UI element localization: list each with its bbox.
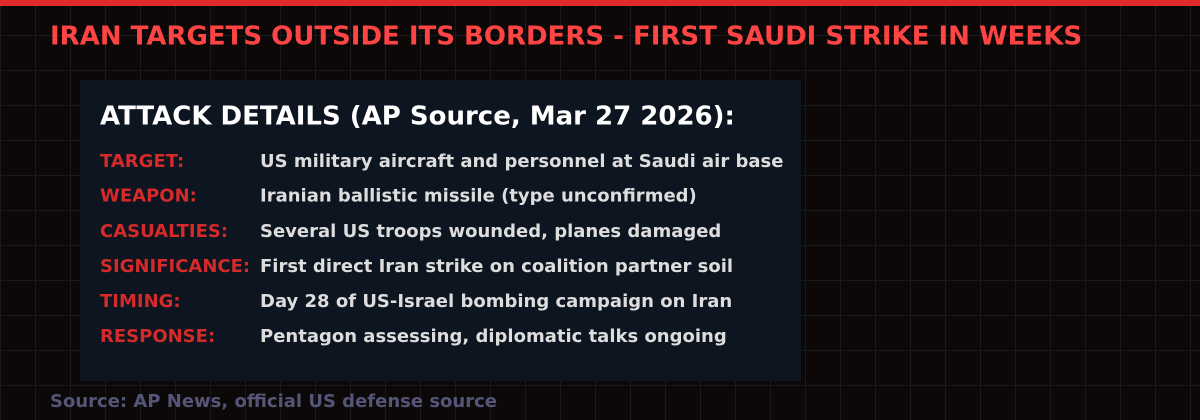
row: target: US military aircraft and personnel at Saudi air base — [260, 151, 783, 172]
row: significance: SIGNIFICANCE: — [100, 256, 250, 277]
title: IRAN TARGETS OUTSIDE ITS BORDERS - FIRST SAUDI STRIKE IN WEEKS — [50, 22, 1082, 52]
row: response: Pentagon assessing, diplomatic talks ongoing — [260, 326, 727, 347]
top accent bar — [0, 0, 1200, 6]
row: target: TARGET: — [100, 151, 184, 172]
source note: Source: AP News, official US defense source — [50, 391, 497, 412]
panel heading: ATTACK DETAILS (AP Source, Mar 27 2026): — [100, 102, 735, 132]
row: significance: First direct Iran strike on coalition partner soil — [260, 256, 733, 277]
row: response: RESPONSE: — [100, 326, 215, 347]
row: timing: Day 28 of US-Israel bombing campaign on Iran — [260, 291, 732, 312]
row: weapon: WEAPON: — [100, 186, 197, 206]
row: weapon: Iranian ballistic missile (type unconfirmed) — [260, 186, 697, 206]
panel: attack details — [80, 80, 801, 381]
row: casualties: CASUALTIES: — [100, 221, 228, 242]
row: timing: TIMING: — [100, 291, 181, 312]
row: casualties: Several US troops wounded, planes damaged — [260, 221, 721, 242]
